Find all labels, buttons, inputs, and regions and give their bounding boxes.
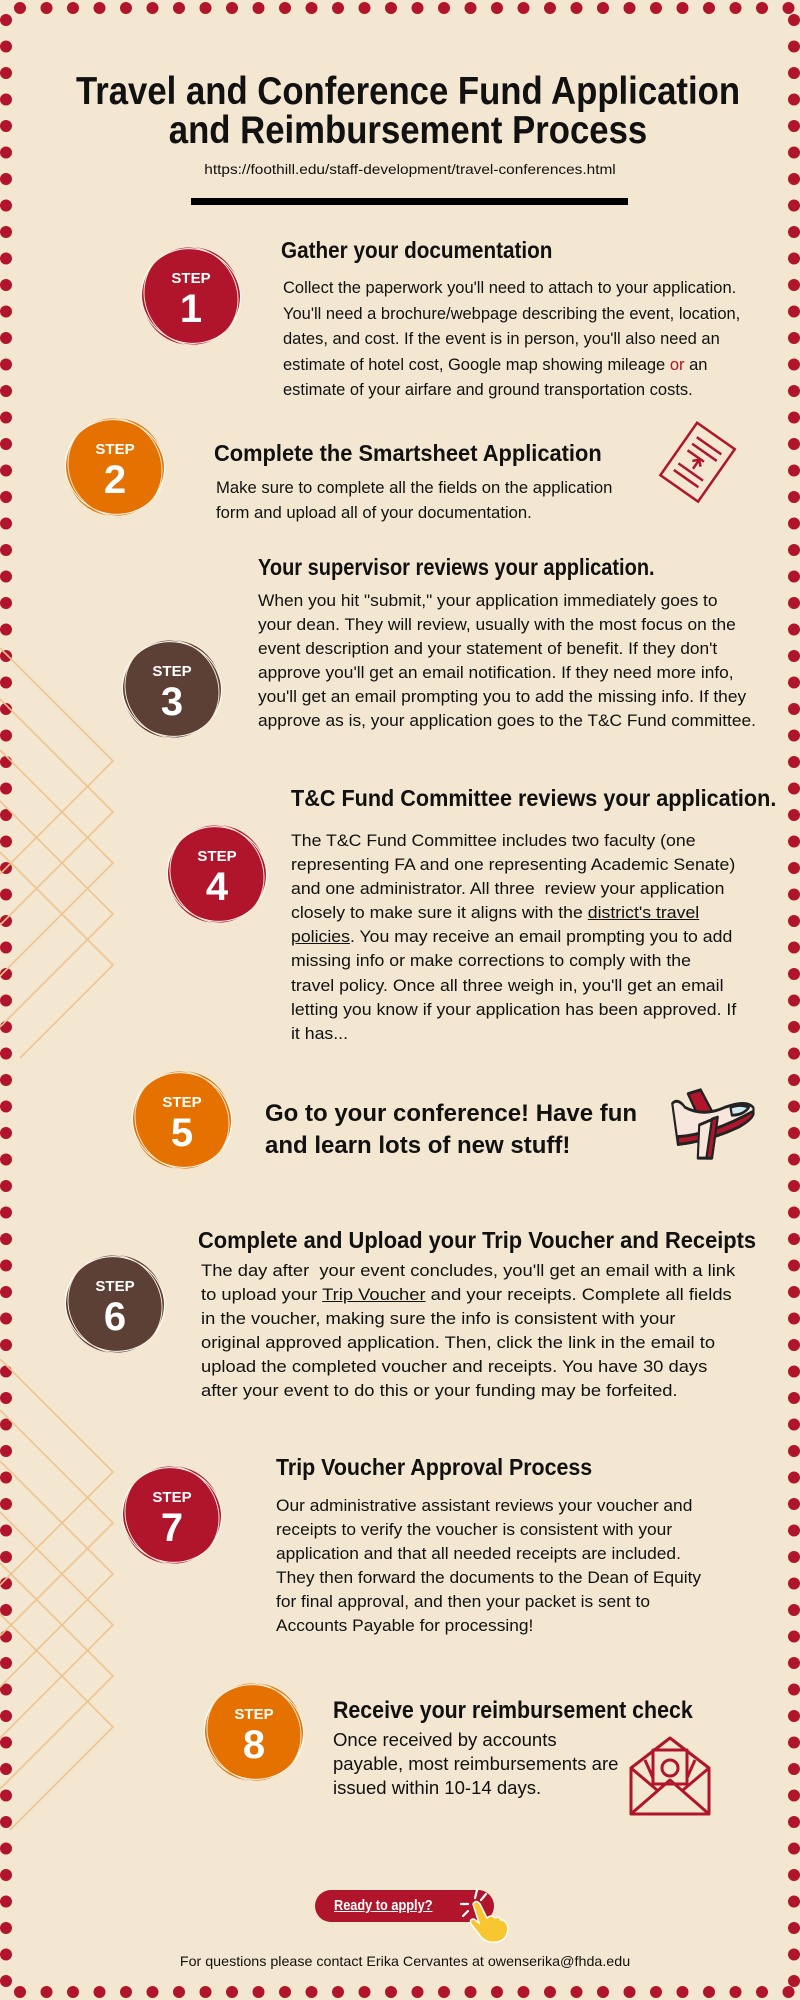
step 6 body [201,1261,736,1400]
button: ready to apply [315,1890,494,1922]
step 5 text: and learn lots of new stuff! [265,1132,570,1159]
step 4 heading: T&C Fund Committee reviews your application. [291,785,776,811]
step 7 circle: STEP [152,1489,192,1506]
step 7 heading: Trip Voucher Approval Process [276,1454,592,1480]
title: Travel and Conference Fund Application [76,70,740,113]
step 4 body: it has... [291,1024,348,1043]
title: and Reimbursement Process [169,109,647,152]
step 3 circle [122,640,222,738]
step 1 body: estimate of hotel cost, Google map showing mileage or an [283,354,707,374]
icon: document upload [658,421,736,504]
url: https://foothill.edu/staff-development/travel-conferences.html [204,161,616,177]
step 2 circle [64,418,166,516]
step 2 body: Make sure to complete all the fields on the application [216,478,612,497]
step 7 body: Accounts Payable for processing! [276,1616,533,1635]
step 1 body: estimate of your airfare and ground transportation costs. [283,380,693,399]
step 6 body: after your event to do this or your funding may be forfeited. [201,1381,678,1400]
step 8 body [333,1730,618,1798]
button: ready to apply: Ready to apply? [334,1897,432,1914]
step 3 heading: Your supervisor reviews your application. [258,554,655,580]
icon: pointing hand [460,1889,509,1944]
step 3 body: you'll get an email prompting you to add the missing info. If they [258,687,746,706]
step 8 circle: 8 [243,1723,265,1767]
step 4 body: closely to make sure it aligns with the district's travel [291,903,699,922]
step 3 body: approve as is, your application goes to the T&C Fund committee. [258,711,756,730]
step 1 circle [140,247,242,345]
step 6 circle [64,1255,166,1353]
step 6 circle: STEP [95,1278,135,1295]
step 3 body: your dean. They will review, usually with the most focus on the [258,615,736,634]
divider bar [191,198,628,205]
step 3 circle: 3 [161,680,183,724]
step 7 body [276,1496,701,1635]
step 3 body [258,591,756,730]
step 7 body: for final approval, and then your packet is sent to [276,1592,650,1611]
title [76,70,740,152]
step 4 circle [166,825,268,923]
step 1 body: You'll need a brochure/webpage describing the event, location, [283,304,740,322]
step 1 body: Collect the paperwork you'll need to attach to your application. [283,278,736,297]
step 2 heading: Complete the Smartsheet Application [214,440,602,466]
step 4 body: travel policy. Once all three weigh in, you'll get an email [291,976,724,995]
step 2 body [216,478,612,522]
step 8 body: payable, most reimbursements are [333,1754,618,1774]
step 1 circle: 1 [180,287,202,331]
step 7 circle: 7 [161,1506,183,1550]
step 1 circle: STEP [171,270,211,287]
step 2 body: form and upload all of your documentation. [216,503,532,522]
step 2 circle: 2 [104,458,126,502]
step 4 body: and one administrator. All three review your application [291,879,724,898]
step 1 body: dates, and cost. If the event is in person, you'll also need an [283,329,720,348]
step 4 body: representing FA and one representing Academic Senate) [291,855,735,874]
step 4 body [291,831,736,1043]
step 8 circle: STEP [234,1706,274,1723]
step 8 circle [204,1683,304,1781]
step 7 body: application and that all needed receipts are included. [276,1544,681,1563]
step 3 body: event description and your statement of benefit. If they don't [258,639,717,658]
step 1 body [283,278,740,399]
step 7 body: receipts to verify the voucher is consistent with your [276,1520,672,1539]
step 5 text [265,1100,637,1159]
step 5 circle [132,1071,232,1169]
step 8 body: Once received by accounts [333,1730,557,1750]
step 6 body: The day after your event concludes, you'll get an email with a link [201,1261,735,1280]
step 4 body: letting you know if your application has been approved. If [291,1000,736,1019]
step 4 body: missing info or make corrections to comply with the [291,951,691,970]
step 1 heading: Gather your documentation [281,237,552,263]
step 6 body: upload the completed voucher and receipts. You have 30 days [201,1357,707,1376]
step 6 body: to upload your Trip Voucher and your receipts. Complete all fields [201,1285,732,1304]
step 8 body: issued within 10-14 days. [333,1778,541,1798]
step 4 circle: STEP [197,848,237,865]
step 3 body: When you hit "submit," your application immediately goes to [258,591,718,610]
step 6 circle: 6 [104,1295,126,1339]
step 5 text: Go to your conference! Have fun [265,1100,637,1127]
step 4 body: policies. You may receive an email prompting you to add [291,927,732,946]
step 5 circle: STEP [162,1094,202,1111]
step 6 heading: Complete and Upload your Trip Voucher and Receipts [198,1227,756,1253]
step 6 body: original approved application. Then, click the link in the email to [201,1333,715,1352]
step 3 body: approve you'll get an email notification. If they need more info, [258,663,734,682]
step 8 heading: Receive your reimbursement check [333,1697,693,1724]
step 3 circle: STEP [152,663,192,680]
icon: envelope with money [630,1736,710,1816]
icon: airplane [671,1088,755,1160]
step 7 body: Our administrative assistant reviews your voucher and [276,1496,692,1515]
step 4 body: The T&C Fund Committee includes two faculty (one [291,831,696,850]
step 4 circle: 4 [206,865,229,909]
step 6 body: in the voucher, making sure the info is consistent with your [201,1309,676,1328]
footer contact: For questions please contact Erika Cervantes at owenserika@fhda.edu [180,1953,630,1969]
step 5 circle: 5 [171,1111,193,1155]
step 7 body: They then forward the documents to the Dean of Equity [276,1568,701,1587]
step 2 circle: STEP [95,441,135,458]
step 7 circle [122,1466,222,1564]
